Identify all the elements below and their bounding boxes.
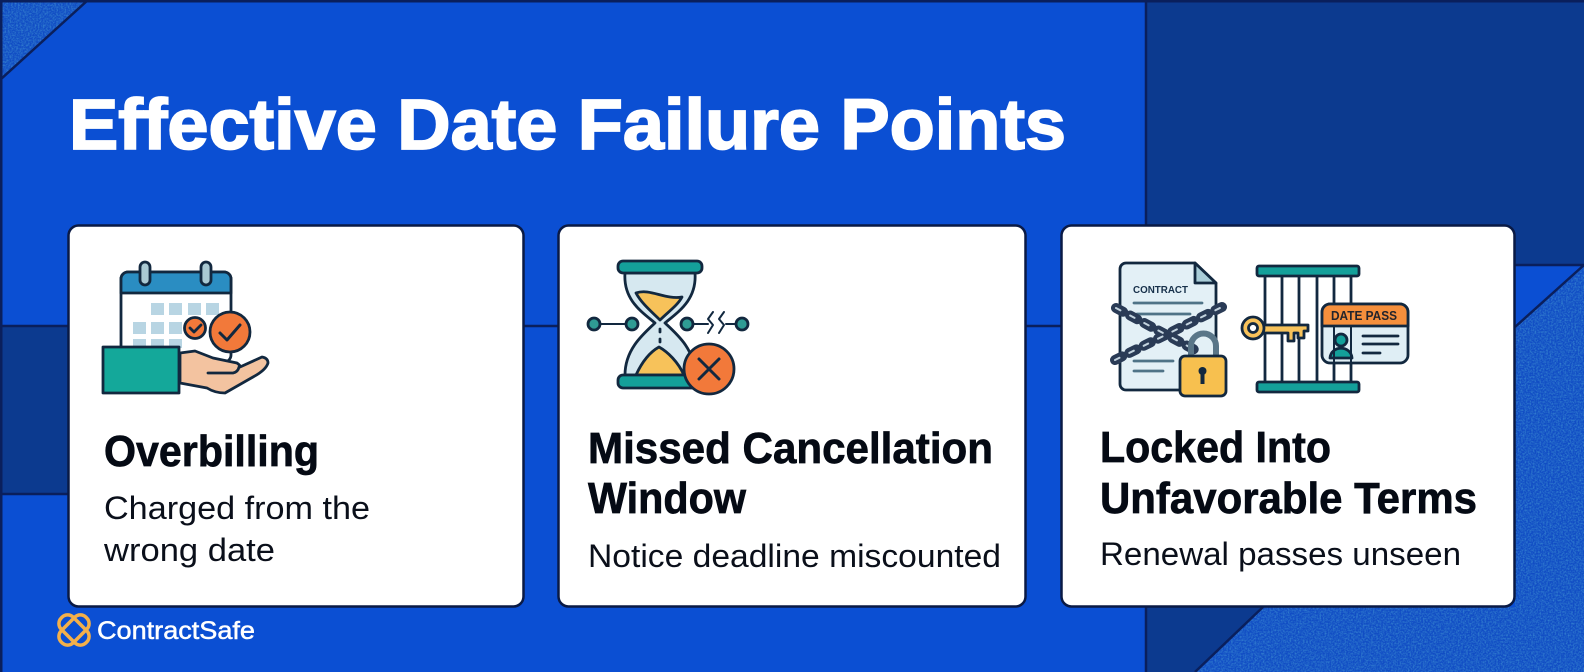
wordmark: ContractSafe	[97, 617, 255, 645]
panel: locked into unfavorable terms	[1062, 226, 1514, 606]
icon: barred gate with key and date pass: DATE PASS	[1331, 309, 1397, 323]
description: locked into unfavorable terms: Renewal passes unseen	[1100, 536, 1461, 572]
heading: locked into unfavorable terms	[1100, 423, 1477, 523]
icon: barred gate with key and date pass	[1242, 266, 1408, 392]
icon: chained contract: CONTRACT	[1133, 284, 1189, 296]
description: overbilling	[103, 490, 370, 568]
panel: missed cancellation window	[558, 226, 1026, 606]
title: Effective Date Failure Points	[69, 86, 1066, 165]
description: overbilling: wrong date	[103, 532, 275, 568]
logo: ContractSafe	[56, 612, 255, 648]
icon: calendar in hand	[103, 262, 268, 393]
icon: chained contract	[1115, 263, 1226, 396]
heading: missed cancellation window: Window	[588, 474, 747, 523]
icon: logo mark	[56, 612, 92, 648]
heading: missed cancellation window	[588, 424, 993, 523]
heading: locked into unfavorable terms: Locked Into	[1100, 423, 1331, 472]
description: missed cancellation window: Notice deadline miscounted	[588, 538, 1001, 574]
heading: locked into unfavorable terms: Unfavorable Terms	[1100, 474, 1477, 523]
heading: overbilling: Overbilling	[104, 427, 319, 476]
description: overbilling: Charged from the	[104, 490, 370, 526]
heading: missed cancellation window: Missed Cancellation	[588, 424, 993, 473]
icon: hourglass	[588, 261, 748, 394]
panel: overbilling	[68, 226, 524, 606]
